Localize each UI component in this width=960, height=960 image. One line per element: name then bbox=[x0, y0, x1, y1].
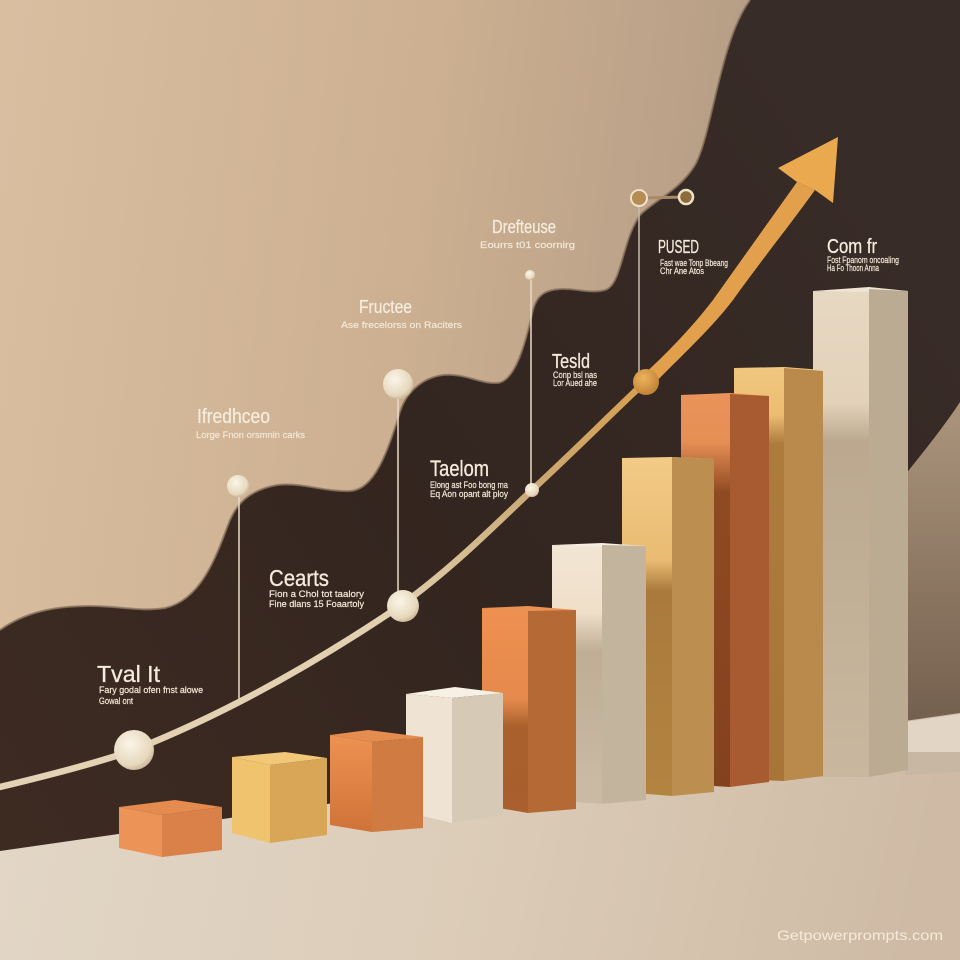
node 3 bbox=[525, 483, 539, 497]
leader lines bbox=[239, 205, 639, 700]
label: Cearts: Fion a Chol tot taalory bbox=[269, 589, 365, 599]
label: Ifredhceo: Lorge Fnon orsmnin carks bbox=[196, 430, 306, 440]
bar 2: yellow bbox=[232, 752, 327, 843]
label: Ifredhceo bbox=[196, 406, 306, 440]
bar 5: orange bbox=[482, 606, 576, 813]
label: Tesld: Tesld bbox=[552, 351, 590, 373]
label: Taelom: Elong ast Foo bong ma bbox=[430, 480, 508, 490]
arrow head bbox=[778, 137, 838, 203]
node 4 bbox=[633, 369, 659, 395]
arrow shaft bbox=[640, 182, 815, 388]
bar 1: orange bbox=[119, 800, 222, 857]
label: Pused bbox=[658, 237, 728, 276]
label: Tval It: Fary godal ofen fnst alowe bbox=[99, 685, 203, 695]
label: Fructee: Fructee bbox=[359, 297, 412, 317]
watermark: Getpowerprompts.com bbox=[777, 927, 943, 943]
marker 1 bbox=[227, 475, 249, 497]
floor highlight band bbox=[905, 714, 960, 752]
label: Tesld: Conp bsl nas bbox=[553, 370, 597, 380]
label: Tval It bbox=[97, 661, 203, 706]
label: Tesld bbox=[552, 351, 597, 388]
floor bbox=[0, 713, 960, 960]
label: Fructee: Ase frecelorss on Raciters bbox=[341, 320, 463, 330]
bar 10: cream bbox=[813, 287, 908, 777]
bar 8: orange bbox=[681, 393, 769, 787]
node 1 bbox=[114, 730, 154, 770]
label: Com fr: Fost Fpanom oncoaling bbox=[827, 255, 899, 265]
label: Pused: Fast wae Tonp Bbeang bbox=[660, 258, 728, 268]
bar 9: yellow bbox=[734, 367, 823, 781]
bar 3: orange bbox=[330, 730, 423, 832]
label: Com fr: Ha Fo Thoon Anna bbox=[827, 263, 879, 273]
bar 4: cream bbox=[406, 687, 503, 823]
marker 5 bbox=[679, 190, 693, 204]
label: Pused: Chr Ane Atos bbox=[660, 266, 704, 276]
label: Tval It: Tval It bbox=[97, 661, 161, 687]
floor shadow band bbox=[905, 752, 960, 775]
arrow bbox=[640, 137, 838, 388]
label: Com fr: Com fr bbox=[827, 236, 877, 258]
label: Cearts bbox=[269, 565, 365, 609]
label: Drefteuse: Eourrs t01 coornirg bbox=[480, 240, 575, 250]
bar 6: cream bbox=[552, 543, 646, 804]
label: Drefteuse: Drefteuse bbox=[492, 217, 556, 237]
label: Cearts: Cearts bbox=[269, 565, 329, 591]
wave edge bevel bbox=[0, 0, 750, 630]
label: Taelom: Eq Aon opant alt ploy bbox=[430, 489, 508, 499]
curve nodes bbox=[114, 369, 659, 770]
marker 3 bbox=[525, 270, 535, 280]
label: Tval It: Gowal ont bbox=[99, 696, 133, 706]
label: Com fr bbox=[827, 236, 899, 273]
label: Taelom: Taelom bbox=[430, 456, 489, 481]
right wall in shadow bbox=[880, 400, 960, 725]
label: Taelom bbox=[430, 456, 508, 499]
marker 2 bbox=[383, 369, 413, 399]
top markers bbox=[227, 190, 693, 497]
bar 7: yellow bbox=[622, 457, 714, 796]
node 2 bbox=[387, 590, 419, 622]
label: Drefteuse bbox=[480, 217, 575, 250]
growth curve bbox=[0, 382, 645, 787]
label: Cearts: Fine dlans 15 Foaartoly bbox=[269, 599, 364, 609]
label: Tesld: Lor Aued ahe bbox=[553, 378, 597, 388]
marker 4 bbox=[631, 190, 647, 206]
label: Ifredhceo: Ifredhceo bbox=[197, 406, 270, 428]
bar chart bbox=[119, 287, 908, 857]
label: Fructee bbox=[341, 297, 463, 330]
marker connector bbox=[640, 197, 686, 198]
label: Pused: PUSED bbox=[658, 237, 699, 257]
